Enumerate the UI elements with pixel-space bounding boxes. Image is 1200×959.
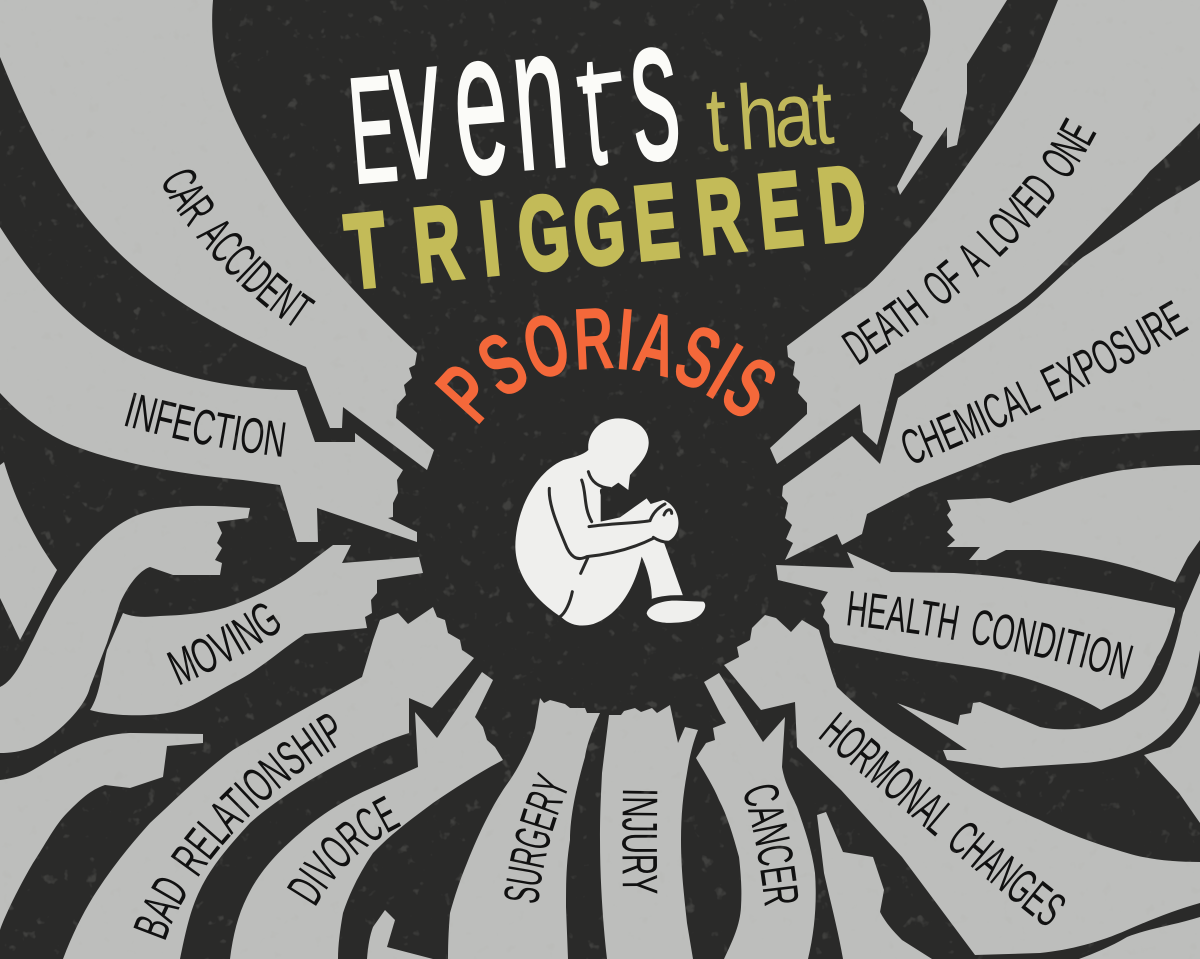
label: CANCER xyxy=(744,784,798,906)
label: CAR ACCIDENT xyxy=(163,170,316,326)
title word: that: a xyxy=(770,62,818,167)
arm shape xyxy=(0,0,434,470)
arm: injury xyxy=(600,705,698,959)
figure foot xyxy=(647,601,705,623)
label: INJURY xyxy=(622,790,658,894)
label: SURGERY xyxy=(504,772,568,903)
right gray wedge xyxy=(1144,703,1200,823)
label: DEATH OF A LOVED ONE xyxy=(841,117,1096,365)
arm: small top right hand xyxy=(897,0,1007,195)
bottom right gray region xyxy=(1079,917,1200,959)
arm: chemical exposure xyxy=(782,180,1200,560)
arm shape xyxy=(63,607,474,959)
arm shape xyxy=(600,705,698,959)
label: CHEMICAL EXPOSURE xyxy=(902,300,1189,463)
title word: TRIGGERED: D xyxy=(813,145,871,264)
arm: bad relationship xyxy=(63,607,474,959)
arm: cancer xyxy=(696,673,816,959)
arm: health condition xyxy=(776,552,1175,710)
arm shape xyxy=(90,545,423,715)
arm shape xyxy=(724,615,1200,955)
label: INFECTION xyxy=(124,392,286,457)
title word: TRIGGERED: G xyxy=(569,169,630,288)
arm: left triangular hand xyxy=(0,462,57,640)
title word: that: h xyxy=(734,64,782,170)
icon: crouching figure xyxy=(515,418,705,626)
arm shape xyxy=(448,698,600,959)
label: HEALTH CONDITION xyxy=(847,591,1134,680)
arm shape xyxy=(782,180,1200,560)
arm: death of a loved one xyxy=(770,0,1200,464)
title word: TRIGGERED: T xyxy=(341,192,391,311)
arm shape xyxy=(770,0,1200,464)
title word: TRIGGERED: R xyxy=(409,185,466,304)
arm: curled hand right xyxy=(897,573,1200,768)
arm: lower left pointing hand xyxy=(0,733,203,930)
arm: hormonal changes xyxy=(724,615,1200,955)
title word: TRIGGERED: G xyxy=(513,174,574,294)
arm: small bottom hand xyxy=(367,910,433,959)
label: DIVORCE xyxy=(286,796,401,906)
arm: moving xyxy=(90,545,423,716)
label: HORMONAL CHANGES xyxy=(818,712,1066,926)
title xyxy=(341,0,871,424)
title word: Events: t xyxy=(577,23,611,197)
title word: that: t xyxy=(809,60,837,164)
title word: Events: E xyxy=(343,44,402,215)
title word: TRIGGERED: E xyxy=(753,151,807,270)
arm: surgery xyxy=(448,698,600,959)
arm shape xyxy=(696,673,816,959)
figure body xyxy=(515,418,683,626)
label: BAD RELATIONSHIP xyxy=(134,714,337,940)
title word: TRIGGERED: E xyxy=(629,163,683,282)
arm shape xyxy=(230,672,503,959)
title word: TRIGGERED: I xyxy=(475,181,505,298)
arm: divorce xyxy=(230,672,503,959)
title word: PSORIASIS: PSORIASIS xyxy=(434,308,775,424)
arm: infection xyxy=(0,227,417,542)
label: MOVING xyxy=(166,604,280,685)
arm: small lower right hand xyxy=(817,812,932,959)
arm: curved pointing hand left xyxy=(0,506,250,753)
figure contour lines xyxy=(549,472,685,617)
title word: TRIGGERED: R xyxy=(691,157,749,276)
arm shape xyxy=(776,552,1175,710)
title accent: crossbar of the t in Events xyxy=(577,76,621,82)
title word: that: t xyxy=(703,68,730,172)
arm: upper right pointing hand xyxy=(947,465,1200,582)
arm shape xyxy=(0,227,417,542)
arm: car accident xyxy=(0,0,434,470)
